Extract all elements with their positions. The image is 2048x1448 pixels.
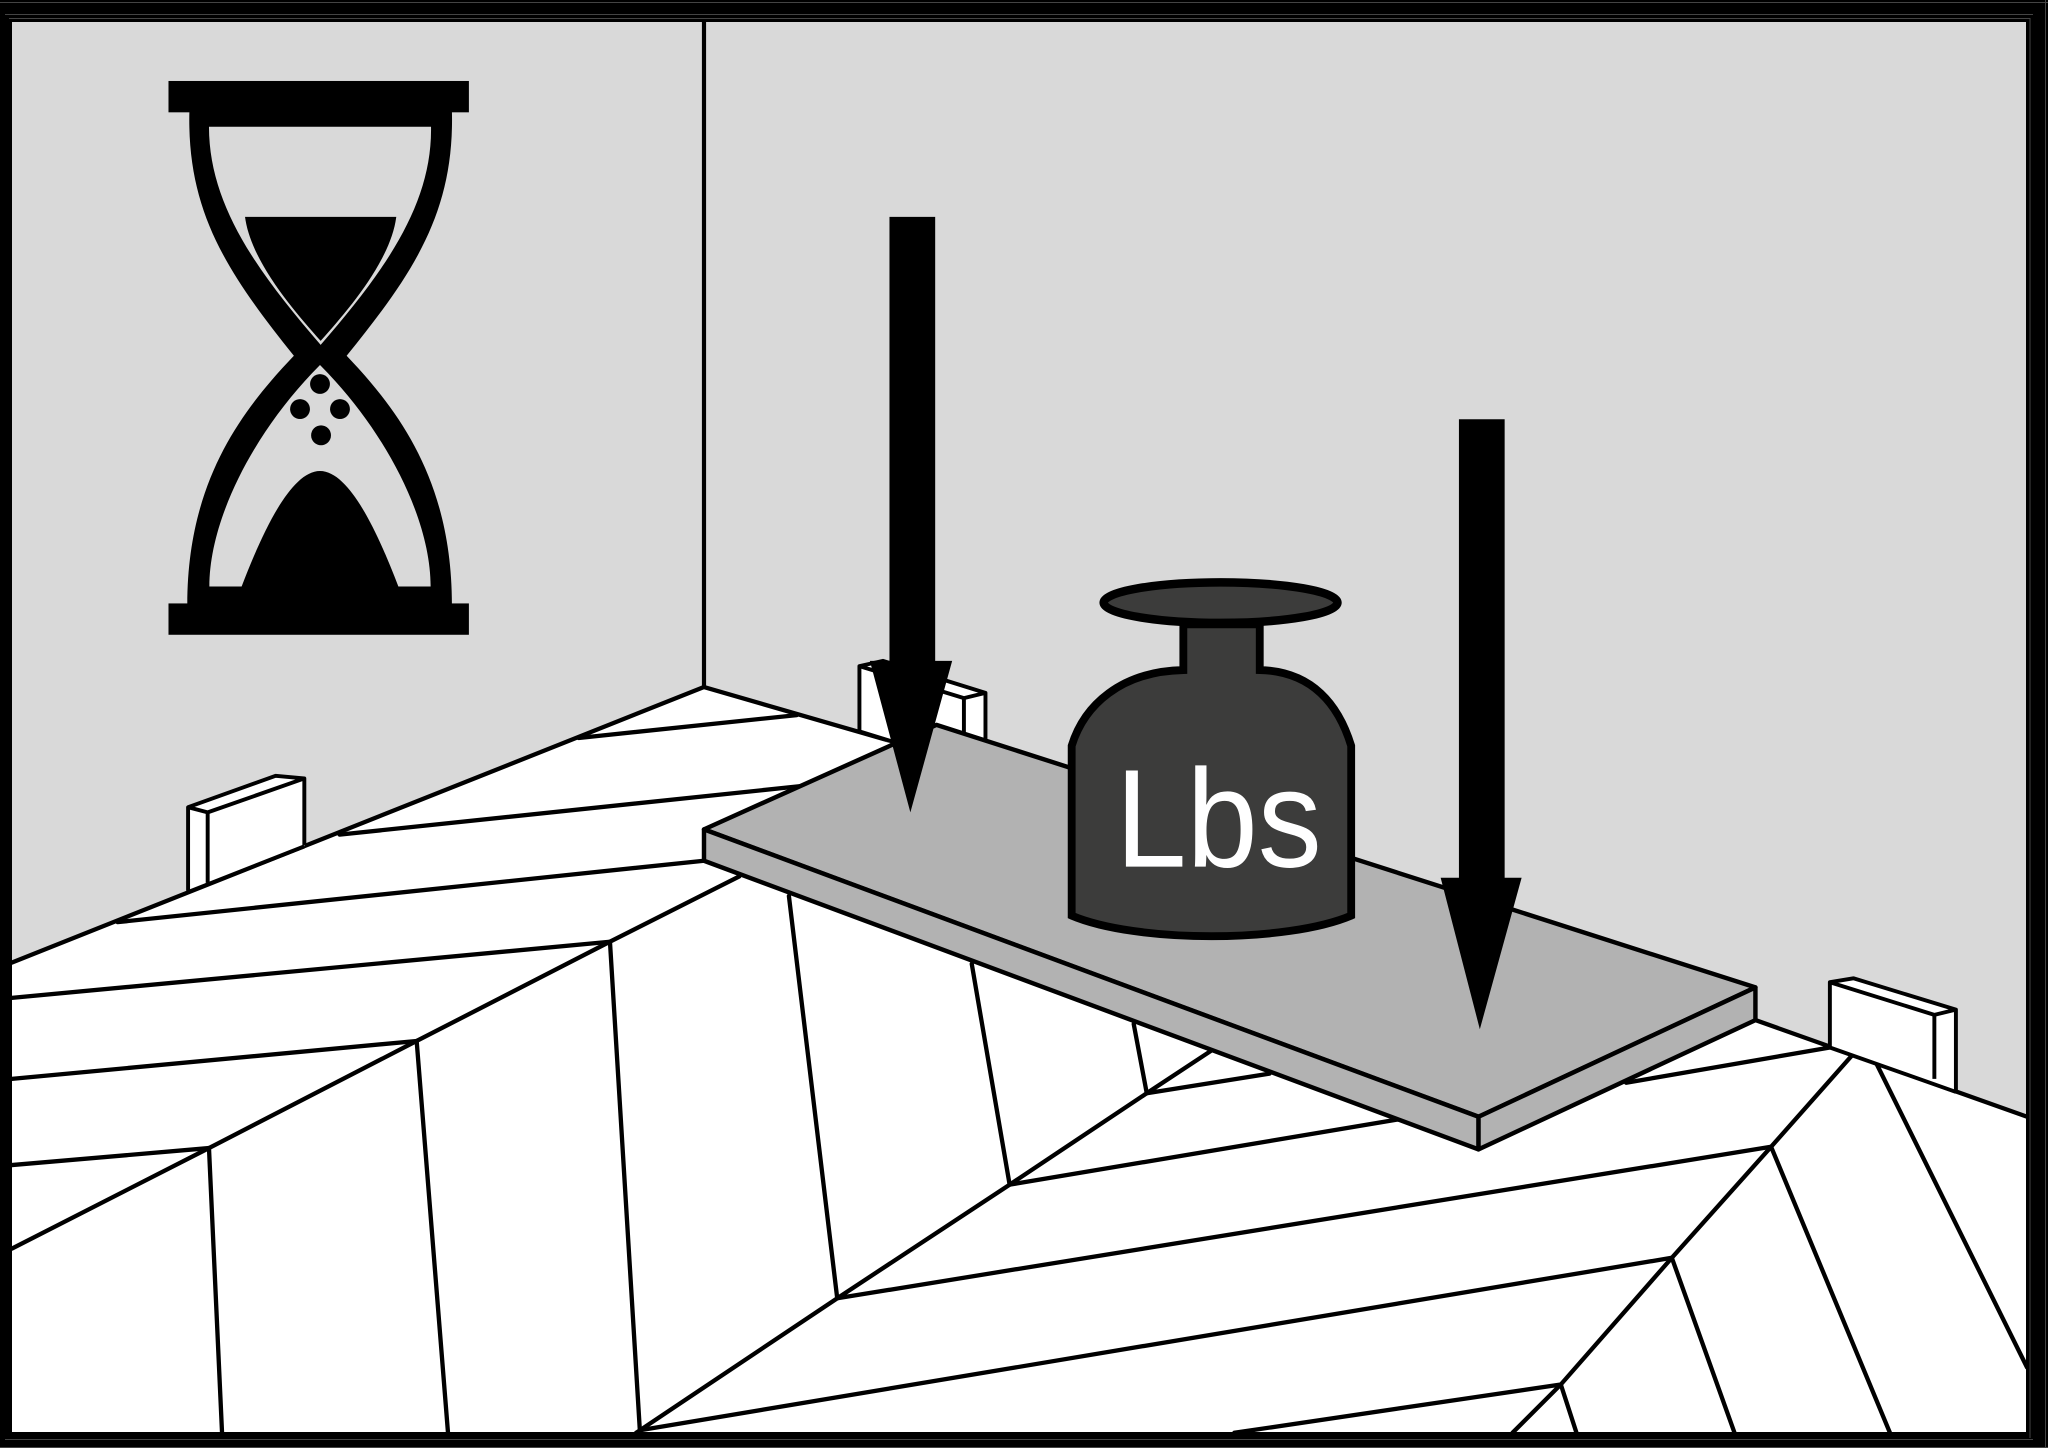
middle wall block bbox=[859, 661, 985, 744]
hourglass upper sand bbox=[245, 217, 396, 341]
hourglass top bar bbox=[168, 81, 469, 112]
falling sand grains bbox=[290, 374, 350, 445]
weight label: Lbs bbox=[1115, 740, 1322, 897]
arrow: left downward load bbox=[870, 217, 952, 812]
icon: hourglass bbox=[168, 81, 469, 635]
panel: floor bbox=[12, 687, 2027, 1437]
floor joists bbox=[12, 687, 2027, 1433]
hourglass lower sand bbox=[239, 471, 401, 594]
hourglass bottom bar bbox=[168, 603, 469, 635]
right wall block bbox=[1830, 978, 1956, 1092]
weight bbox=[1072, 582, 1351, 936]
plank bbox=[704, 725, 1755, 1149]
arrow: right downward load bbox=[1441, 419, 1522, 1029]
weight body bbox=[1072, 624, 1351, 936]
left wall block bbox=[188, 776, 304, 892]
weight top knob bbox=[1104, 582, 1337, 623]
hourglass glass bbox=[187, 111, 452, 605]
wall corner line bbox=[702, 20, 706, 687]
